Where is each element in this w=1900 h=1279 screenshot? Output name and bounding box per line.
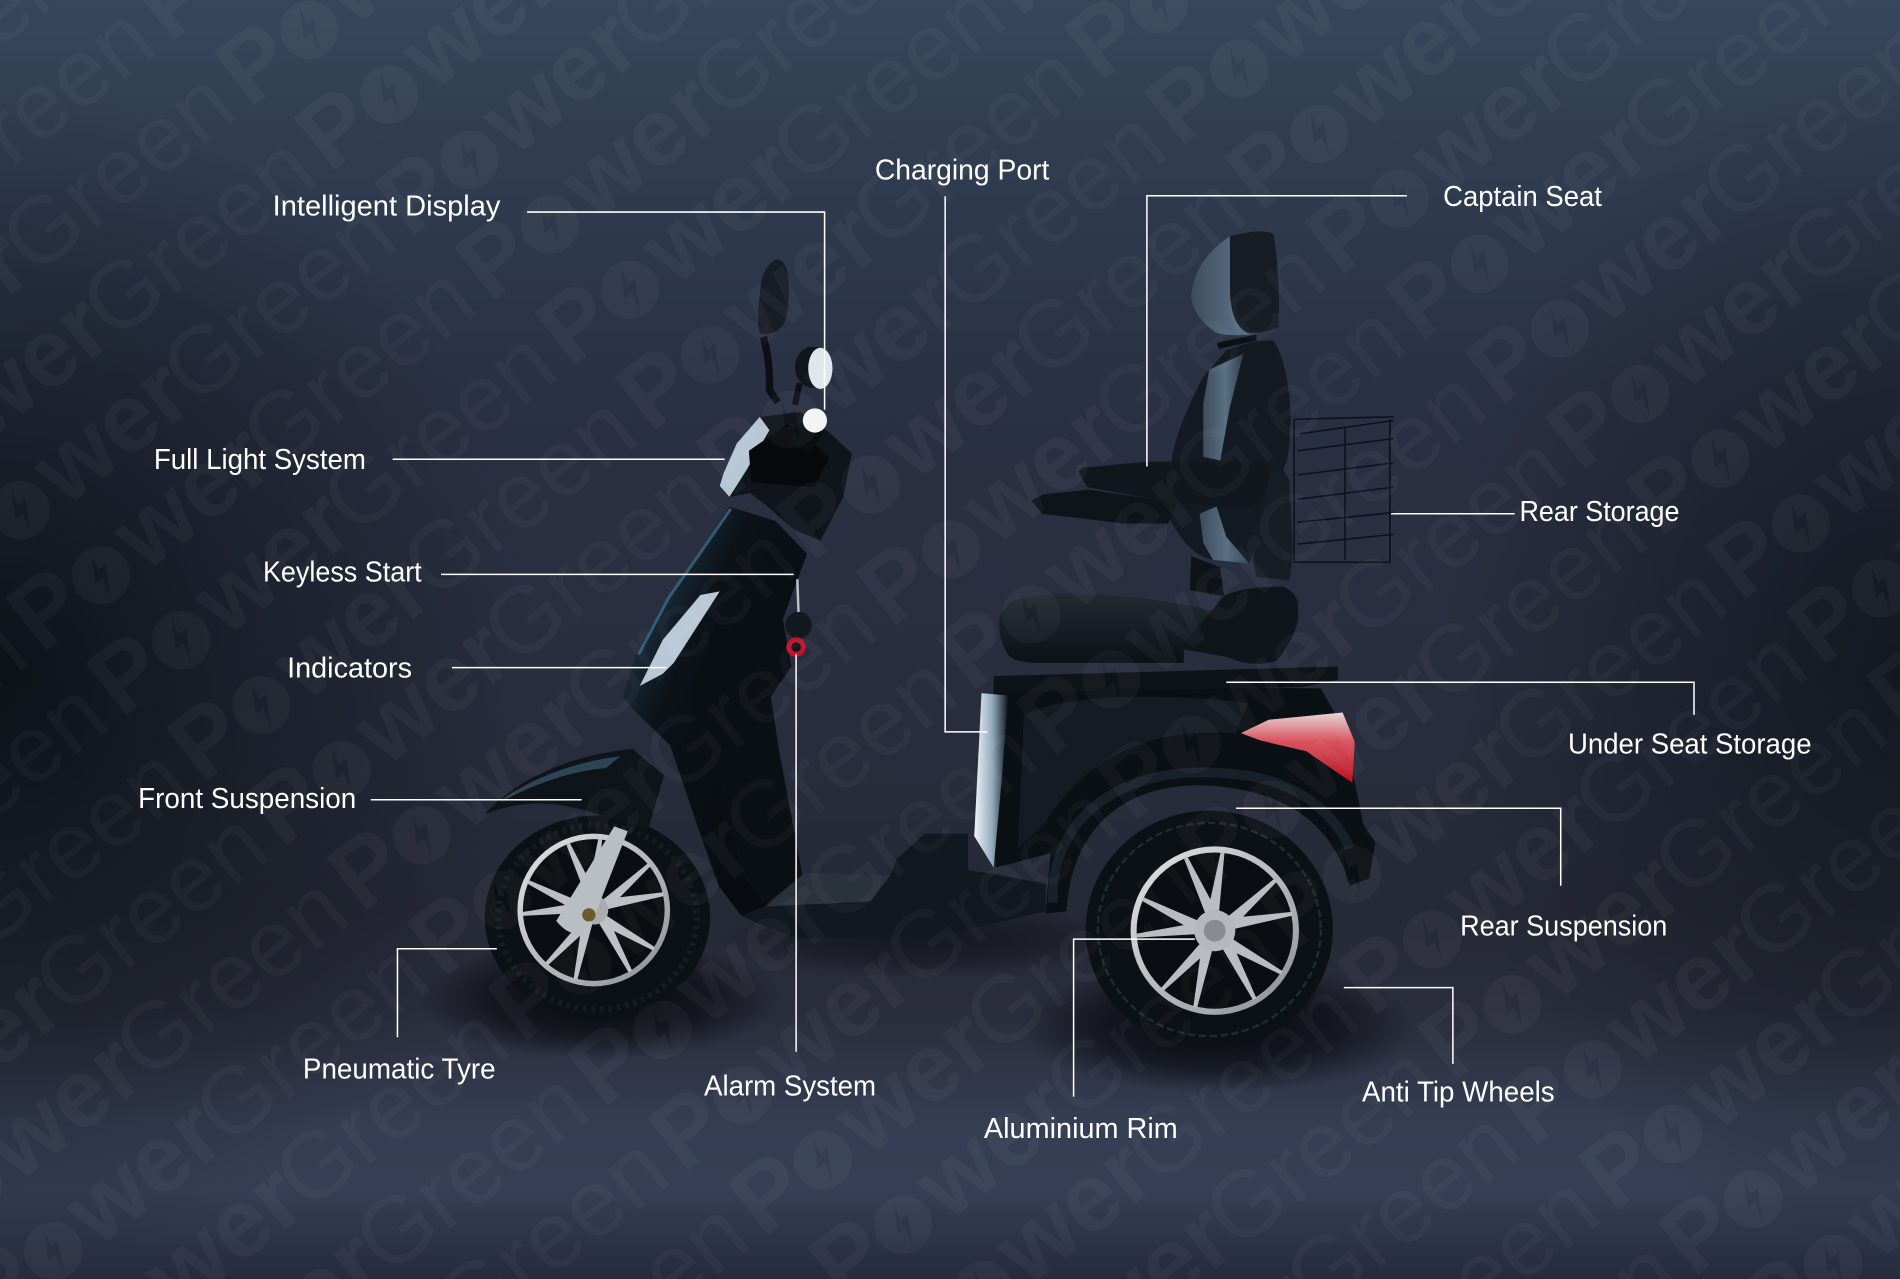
rear basket [1294,417,1393,562]
body sheen [1018,697,1248,848]
headrest [1191,231,1279,335]
label: Captain Seat: Captain Seat [1443,181,1602,213]
rear wheel [1086,811,1333,1048]
fender highlight [499,756,620,802]
seat back lower lit panel [1200,507,1249,563]
seat back upper lit panel [1203,354,1243,460]
front leg shield [623,507,807,916]
callout lines [371,196,1694,1097]
fender [485,749,664,829]
label: Charging Port: Charging Port [875,154,1049,186]
label: Anti Tip Wheels: Anti Tip Wheels [1362,1076,1555,1108]
seat side pivot [1184,586,1298,664]
ground shadows [418,900,1418,1094]
label: Indicators: Indicators [287,652,412,684]
tail light [1241,713,1355,783]
rear body [988,686,1375,914]
left mirror [758,259,789,402]
label: Keyless Start: Keyless Start [263,557,422,589]
headrest side panel [1230,231,1279,333]
label: Alarm System: Alarm System [704,1070,876,1102]
seat post [1190,556,1224,596]
seat rails [994,666,1338,693]
handle grip [788,408,827,453]
label: Aluminium Rim: Aluminium Rim [984,1113,1178,1145]
seat cushion [999,593,1213,663]
label: Front Suspension: Front Suspension [138,783,356,815]
right mirror [795,347,832,405]
head unit cowl [729,412,852,540]
scooter [485,231,1393,1048]
lower armrest [1031,490,1177,523]
seat bracket [1253,470,1293,580]
label: Full Light System: Full Light System [154,444,366,476]
floorboard [742,834,1046,938]
label: Under Seat Storage: Under Seat Storage [1568,729,1812,761]
handlebar controls [749,424,829,487]
label: Rear Suspension: Rear Suspension [1460,910,1667,942]
indicator lens [640,591,720,686]
label: Rear Storage: Rear Storage [1520,496,1679,528]
headlight [720,417,769,497]
upper armrest [1078,462,1270,508]
headrest collar [1217,334,1257,349]
label: Intelligent Display: Intelligent Display [273,191,501,223]
white reflective strip [974,693,1008,868]
wheel arch trim [1053,772,1350,903]
key fob [785,579,812,657]
front wheel [485,816,710,1019]
label: Pneumatic Tyre: Pneumatic Tyre [303,1053,496,1085]
leg panel [691,619,802,904]
seat back [1167,340,1290,563]
leg sheen [639,509,731,654]
floor tread [766,872,891,906]
